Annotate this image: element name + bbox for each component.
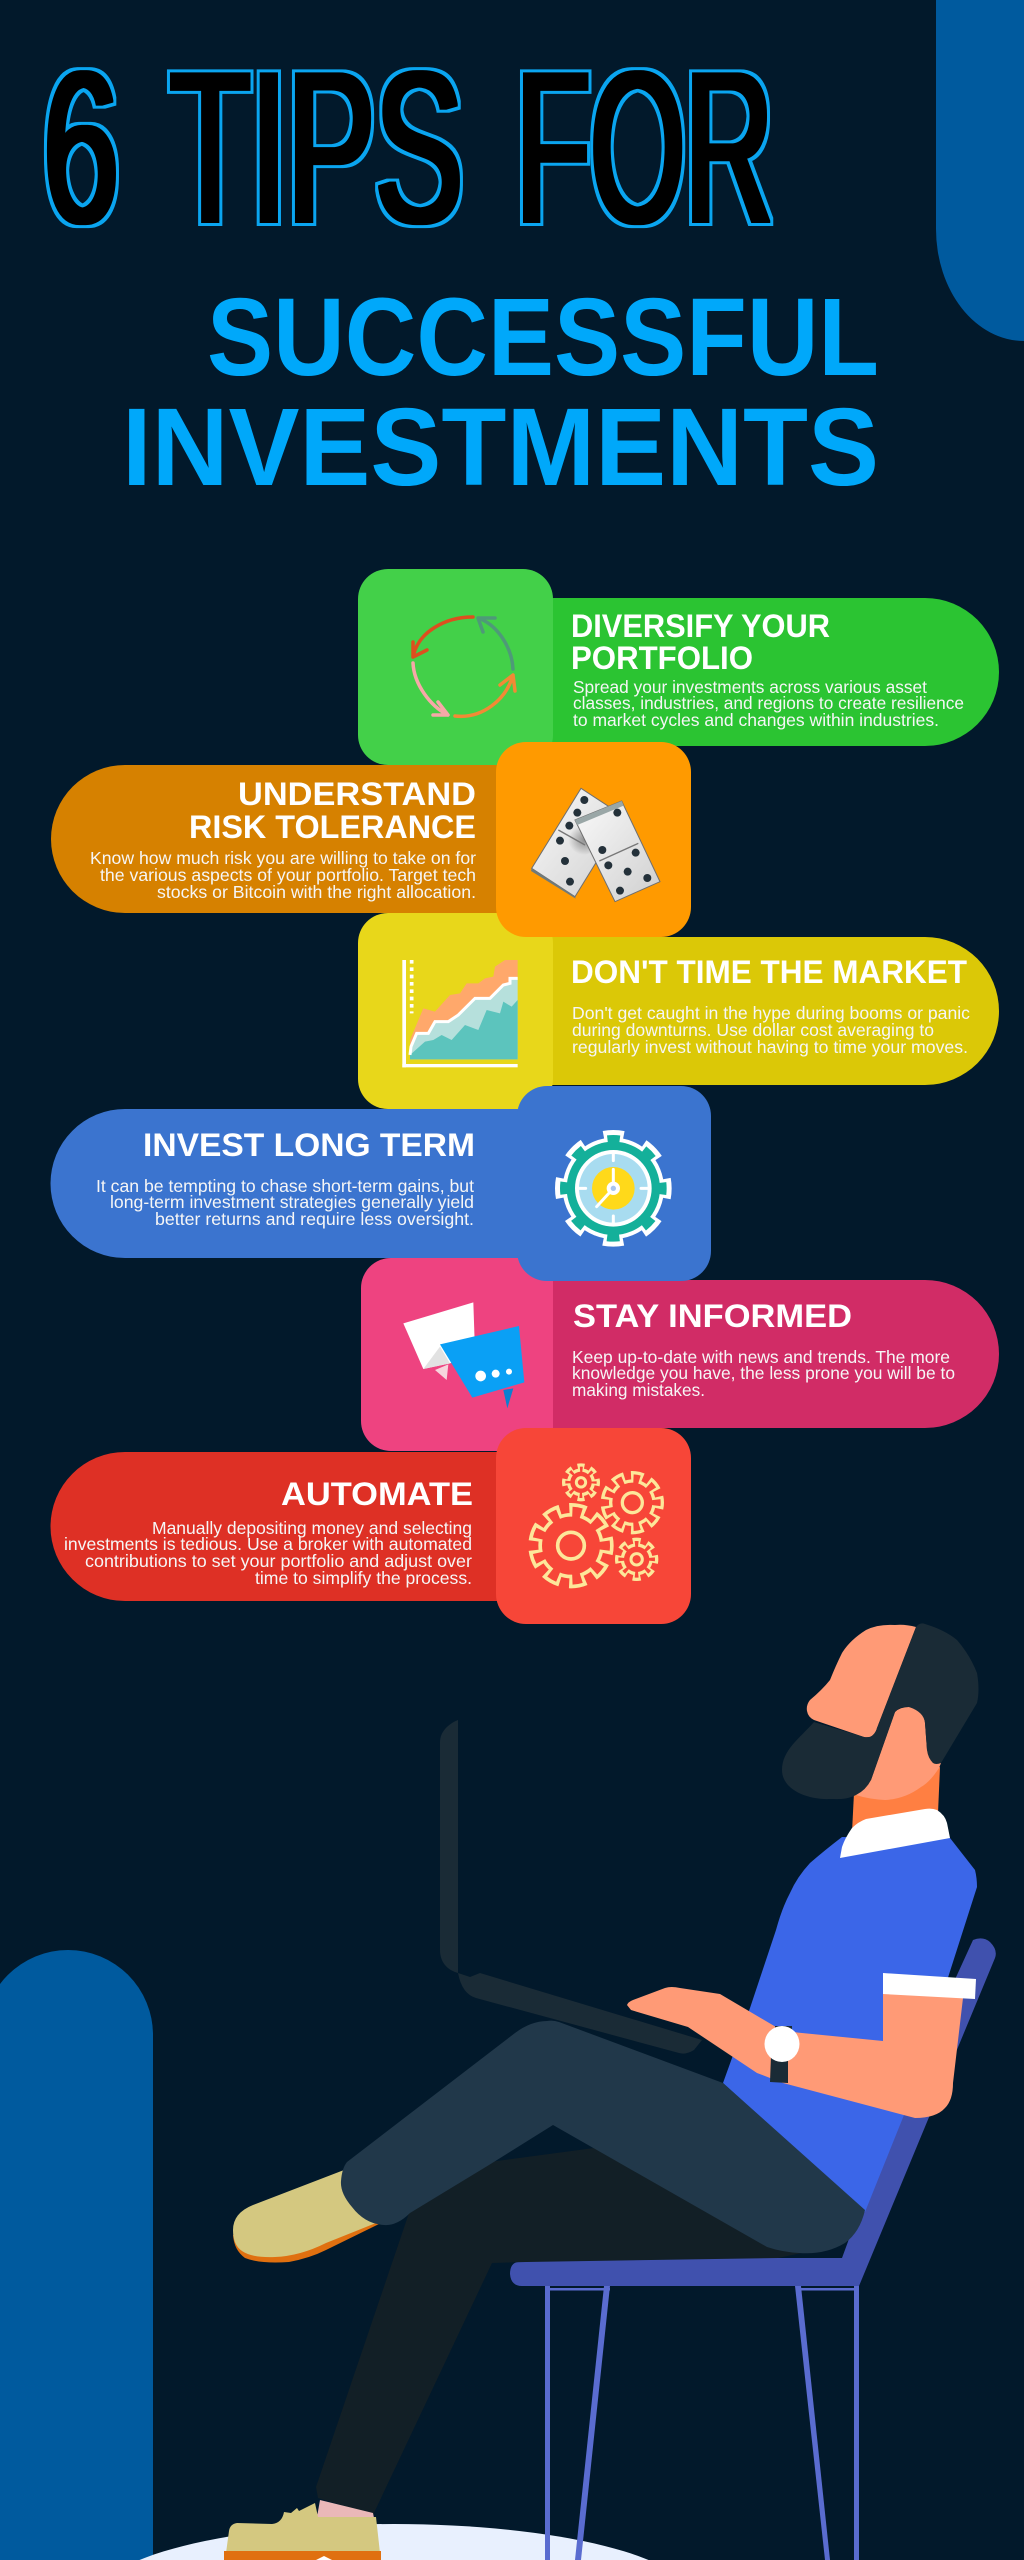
title: 6 tips for: TIPS (170, 26, 463, 268)
icon: dominoes (531, 788, 660, 902)
heading: DON'T TIME THE MARKET (571, 954, 967, 990)
title: investments: INVESTMENTS (122, 386, 879, 509)
body text: Know how much risk you are willing to take on for (90, 848, 476, 868)
panel: diversify your portfolio (358, 569, 999, 765)
body text (64, 1518, 472, 1588)
icon: clock gear (563, 1138, 664, 1239)
panel: invest long term (51, 1086, 711, 1281)
body text: stocks or Bitcoin with the right allocation. (157, 882, 476, 902)
panel: automate (51, 1428, 691, 1624)
heading: STAY INFORMED (573, 1298, 852, 1334)
hair and beard (782, 1623, 978, 1799)
body text (572, 1003, 970, 1057)
sleeve cuff (883, 1973, 976, 1999)
panel: don't time the market (358, 913, 999, 1109)
body text: to market cycles and changes within industries. (573, 710, 939, 730)
body text: Spread your investments across various asset (573, 677, 927, 697)
body text: making mistakes. (572, 1380, 705, 1400)
raised shoe (233, 2170, 379, 2262)
body text: regularly invest without having to time your moves. (572, 1037, 968, 1057)
collar (840, 1809, 950, 1858)
panel: stay informed (361, 1258, 999, 1451)
body text: long-term investment strategies generally yield (110, 1192, 474, 1212)
body text: classes, industries, and regions to create resilience (573, 693, 964, 713)
decorative blue shape: bottom left (0, 1950, 153, 2560)
body text: knowledge you have, the less prone you will be to (572, 1363, 955, 1383)
icon: area chart (402, 960, 518, 1067)
heading line 2: RISK TOLERANCE (189, 809, 476, 845)
heading: AUTOMATE (281, 1476, 473, 1512)
watch (764, 2026, 800, 2083)
heading: INVEST LONG TERM (143, 1127, 475, 1163)
chair (510, 1938, 996, 2560)
body text (573, 677, 964, 730)
heading: DIVERSIFY YOUR (571, 608, 830, 644)
back leg (316, 2148, 830, 2515)
illustration: man on chair with laptop (224, 1623, 996, 2560)
panel: understand risk tolerance (51, 742, 691, 937)
icon: speech bubbles (403, 1302, 524, 1408)
decorative blue shape: top right (936, 0, 1024, 341)
body text: It can be tempting to chase short-term gains, but (96, 1176, 474, 1196)
body text: time to simplify the process. (255, 1568, 472, 1588)
body text: Keep up-to-date with news and trends. The more (572, 1347, 950, 1367)
body text: Manually depositing money and selecting (152, 1518, 472, 1538)
body text: during downturns. Use dollar cost averaging to (572, 1020, 934, 1040)
title: successful: SUCCESSFUL (207, 276, 879, 399)
arm and hand (627, 1987, 963, 2118)
body text (96, 1176, 474, 1229)
heading line 2: PORTFOLIO (571, 640, 753, 676)
body text: the various aspects of your portfolio. Target tech (100, 865, 476, 885)
body text (90, 848, 476, 902)
body text (572, 1347, 955, 1400)
body text: investments is tedious. Use a broker with automated (64, 1534, 472, 1554)
neck shadow (852, 1767, 940, 1832)
laptop (440, 1720, 702, 2054)
front leg (341, 2021, 865, 2253)
lower shoe (224, 2500, 381, 2560)
body text: contributions to set your portfolio and adjust over (85, 1551, 472, 1571)
body text: Don't get caught in the hype during booms or panic (572, 1003, 970, 1023)
title: 6 tips for: FOR (516, 26, 773, 268)
title: 6 tips for: 6 (43, 26, 119, 268)
neck (856, 1707, 941, 1800)
icon: gears (535, 1467, 658, 1582)
icon: cycle arrows (413, 617, 515, 716)
shirt (723, 1837, 977, 2212)
face (807, 1625, 916, 1737)
title: 6 tips for (43, 26, 773, 268)
body text: better returns and require less oversight. (155, 1209, 474, 1229)
ground ellipse (96, 2524, 692, 2560)
heading: UNDERSTAND (238, 776, 476, 812)
